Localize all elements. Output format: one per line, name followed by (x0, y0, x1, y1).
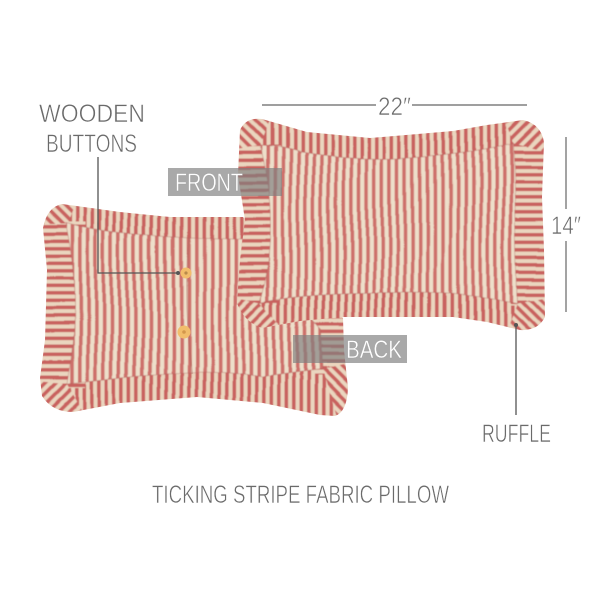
pillow: back view (40, 204, 348, 416)
dimension: width 22 inches: 22″ (378, 93, 411, 121)
front pillow body (260, 143, 517, 303)
caption: TICKING STRIPE FABRIC PILLOW (152, 481, 449, 509)
label: wooden buttons: BUTTONS (46, 130, 137, 158)
pillow: front view (237, 118, 545, 330)
label: wooden buttons (39, 100, 145, 158)
label: BACK (293, 335, 407, 364)
infographic canvas (40, 97, 580, 503)
dimension: height 14 inches: 14″ (551, 212, 581, 240)
callout leader: ruffle (514, 323, 518, 415)
button placket fold (187, 238, 192, 374)
label: wooden buttons: WOODEN (39, 100, 145, 128)
icon: wooden button lower (178, 326, 190, 338)
label: BACK: BACK (346, 336, 402, 364)
back pillow body (65, 223, 323, 383)
callout leader: wooden buttons (98, 157, 180, 275)
label: FRONT: FRONT (175, 169, 243, 197)
icon: wooden button upper (180, 268, 192, 278)
label: ruffle: RUFFLE (482, 420, 551, 448)
